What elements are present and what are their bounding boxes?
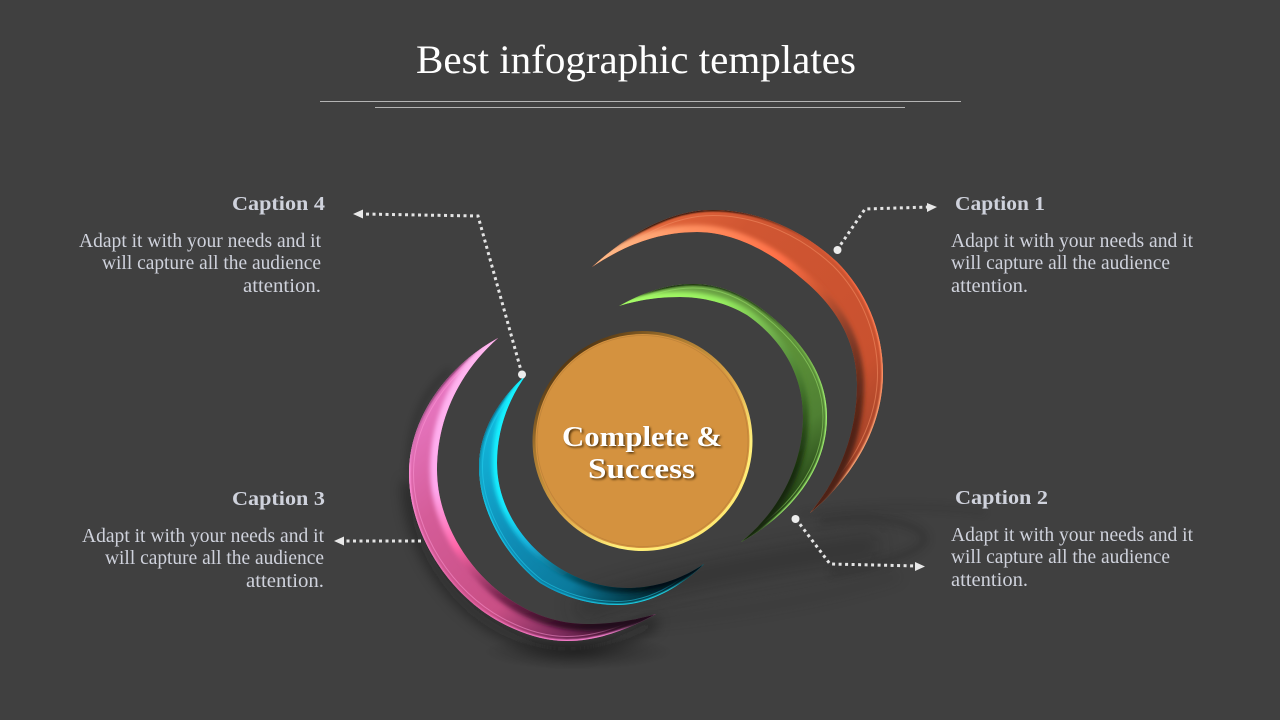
center circle bbox=[534, 332, 751, 550]
text block: caption 3: will capture all the audience bbox=[105, 548, 324, 569]
floor shadows bbox=[575, 507, 985, 625]
text block: caption 3 bbox=[82, 488, 325, 592]
pink crescent drop shadow bbox=[409, 370, 673, 670]
connector: caption 1 bbox=[834, 203, 937, 254]
crescent: blue bbox=[479, 375, 704, 605]
center label bbox=[562, 421, 722, 485]
text block: caption 4: Adapt it with your needs and it bbox=[79, 231, 322, 252]
text block: caption 2: Caption 2 bbox=[955, 487, 1048, 509]
text block: caption 4: will capture all the audience bbox=[102, 253, 321, 274]
text block: caption 1 bbox=[951, 193, 1194, 297]
crescent: green bbox=[619, 284, 827, 542]
text block: caption 1: will capture all the audience bbox=[951, 253, 1170, 274]
text block: caption 4: Caption 4 bbox=[232, 193, 325, 215]
center label: Success bbox=[588, 453, 695, 485]
crescent: orange bbox=[592, 210, 883, 513]
connector: caption 4 bbox=[353, 210, 526, 378]
text block: caption 2 bbox=[951, 487, 1194, 591]
text block: caption 2: Adapt it with your needs and it bbox=[951, 525, 1194, 546]
title underlines bbox=[320, 102, 961, 108]
text block: caption 4 bbox=[79, 193, 325, 297]
text block: caption 4: attention. bbox=[243, 276, 321, 297]
connector: caption 3 bbox=[334, 536, 421, 546]
text block: caption 3: Caption 3 bbox=[232, 488, 325, 510]
text block: caption 1: attention. bbox=[951, 276, 1028, 297]
crescent: pink bbox=[409, 338, 656, 641]
center label: Complete & bbox=[562, 421, 722, 453]
text block: caption 1: Caption 1 bbox=[955, 193, 1045, 215]
title: Best infographic templates bbox=[416, 37, 856, 82]
text block: caption 3: Adapt it with your needs and it bbox=[82, 526, 325, 547]
text block: caption 1: Adapt it with your needs and it bbox=[951, 231, 1194, 252]
text block: caption 3: attention. bbox=[246, 571, 324, 592]
text block: caption 2: attention. bbox=[951, 570, 1028, 591]
text block: caption 2: will capture all the audience bbox=[951, 547, 1170, 568]
connector: caption 2 bbox=[792, 515, 925, 571]
